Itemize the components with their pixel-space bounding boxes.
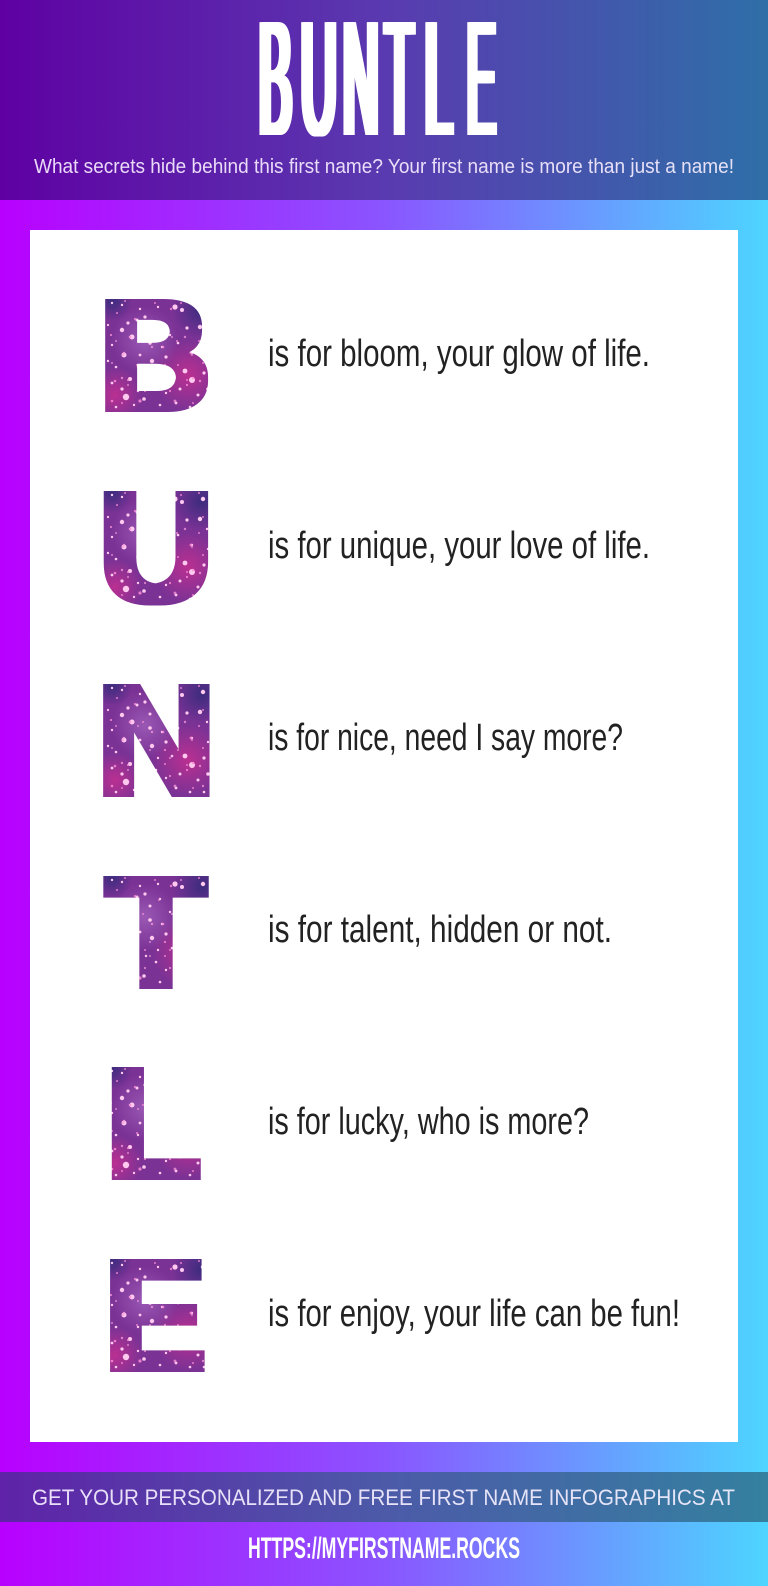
letter B [105, 299, 208, 412]
row N [95, 680, 623, 800]
footer band [0, 1472, 768, 1522]
line T: is for talent, hidden or not. [268, 909, 612, 951]
title [259, 0, 498, 170]
line L: is for lucky, who is more? [268, 1101, 589, 1143]
row U [95, 487, 650, 609]
header band [0, 0, 768, 200]
letter T [103, 876, 209, 989]
subtitle: What secrets hide behind this first name? Your first name is more than just a name! [34, 155, 734, 178]
line N: is for nice, need I say more? [268, 717, 623, 759]
row B [95, 295, 650, 415]
row T [95, 872, 612, 992]
white panel [30, 230, 738, 1442]
letter N [103, 684, 210, 797]
line B: is for bloom, your glow of life. [268, 333, 650, 375]
url: HTTPS://MYFIRSTNAME.ROCKS [248, 1532, 520, 1565]
row L [95, 1063, 589, 1183]
row E [95, 1255, 680, 1375]
letter U [104, 491, 208, 606]
line U: is for unique, your love of life. [268, 525, 650, 567]
letter E [110, 1259, 205, 1372]
letter L [112, 1067, 201, 1180]
